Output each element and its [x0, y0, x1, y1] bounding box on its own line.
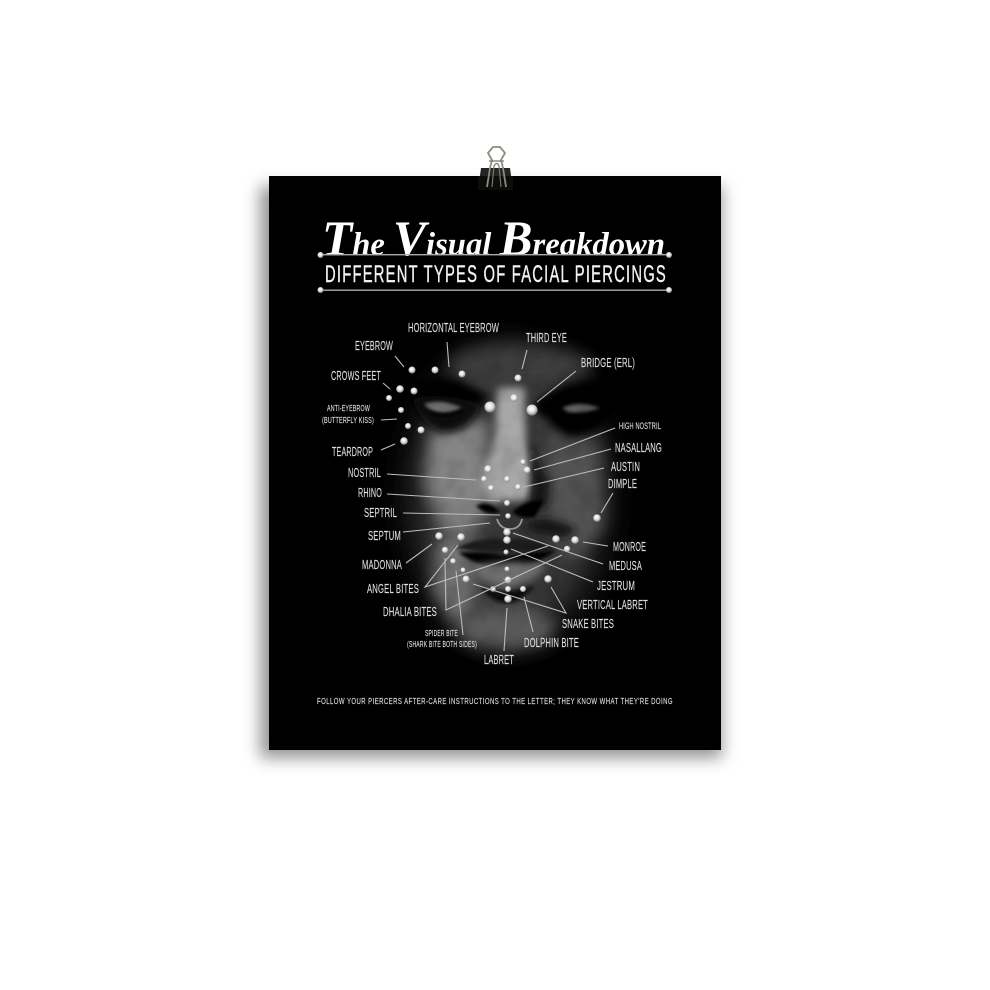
- label: bridge: BRIDGE (ERL): [581, 355, 635, 370]
- label: madonna: MADONNA: [362, 557, 402, 572]
- title: [318, 210, 672, 293]
- label: high nostril: HIGH NOSTRIL: [619, 421, 661, 431]
- subtitle: DIFFERENT TYPES OF FACIAL PIERCINGS: [325, 261, 667, 288]
- label: teardrop: TEARDROP: [332, 444, 373, 459]
- label: jestrum: [511, 549, 635, 593]
- label: dhalia bites: [383, 555, 562, 619]
- label: septum: SEPTUM: [368, 528, 401, 543]
- label: labret: LABRET: [484, 652, 514, 667]
- label: dhalia bites: DHALIA BITES: [383, 604, 437, 619]
- label: third eye: THIRD EYE: [526, 330, 567, 345]
- footer note: FOLLOW YOUR PIERCERS AFTER-CARE INSTRUCTIONS TO THE LETTER; THEY KNOW WHAT THEY'RE DOING: [317, 696, 673, 706]
- septum ring: [497, 519, 522, 529]
- piercing studs: [386, 366, 601, 603]
- label: spider bite: [407, 571, 477, 649]
- label: horizontal eyebrow: HORIZONTAL EYEBROW: [408, 320, 499, 335]
- label: crows feet: [331, 368, 390, 389]
- label: medusa: [513, 533, 642, 573]
- label: eyebrow: EYEBROW: [355, 338, 393, 353]
- label: septril: [364, 505, 500, 520]
- label: dolphin bite: DOLPHIN BITE: [524, 635, 579, 650]
- label: anti-eyebrow: [322, 403, 397, 425]
- lower barbell rule: [318, 287, 672, 293]
- label: labret: [484, 608, 514, 667]
- label: nasallang: NASALLANG: [615, 440, 662, 455]
- face portrait: [394, 331, 622, 662]
- label: spider bite: SPIDER BITE: [425, 628, 458, 638]
- label: dolphin bite: [524, 597, 579, 650]
- label: crows feet: CROWS FEET: [331, 368, 381, 383]
- label: anti-eyebrow: ANTI-EYEBROW: [327, 403, 370, 413]
- label: austin: AUSTIN: [611, 459, 640, 474]
- label: monroe: MONROE: [613, 539, 646, 554]
- label: angel bites: [367, 545, 548, 596]
- label: dimple: DIMPLE: [608, 476, 637, 491]
- label: nasallang: [534, 440, 662, 470]
- label: nostril: [348, 465, 476, 480]
- label: high nostril: [530, 421, 661, 461]
- label: horizontal eyebrow: [408, 320, 499, 367]
- poster shadow: [260, 186, 722, 758]
- script heading: The Visual Breakdown: [322, 210, 665, 266]
- label: medusa: MEDUSA: [609, 558, 642, 573]
- label: rhino: [358, 485, 500, 501]
- label: snake bites: SNAKE BITES: [562, 616, 614, 631]
- label: austin: [524, 459, 640, 487]
- label: jestrum: JESTRUM: [597, 578, 635, 593]
- label: anti-eyebrow: (BUTTERFLY KISS): [322, 415, 374, 425]
- label: monroe: [583, 539, 646, 554]
- upper barbell rule: [318, 252, 672, 258]
- label: vertical labret: VERTICAL LABRET: [577, 597, 648, 612]
- label: angel bites: ANGEL BITES: [367, 581, 419, 596]
- label: bridge: [537, 355, 635, 402]
- icon: binder clip: [478, 147, 513, 190]
- label: spider bite: (SHARK BITE BOTH SIDES): [407, 639, 477, 649]
- label: eyebrow: [355, 338, 404, 367]
- poster panel: [269, 176, 721, 750]
- label: nostril: NOSTRIL: [348, 465, 381, 480]
- label: snake bites: [473, 584, 614, 631]
- label: third eye: [522, 330, 567, 369]
- label: septum: [368, 523, 490, 543]
- label: madonna: [362, 544, 432, 572]
- label: septril: SEPTRIL: [364, 505, 397, 520]
- label: dimple: [601, 476, 637, 513]
- label: rhino: RHINO: [358, 485, 382, 500]
